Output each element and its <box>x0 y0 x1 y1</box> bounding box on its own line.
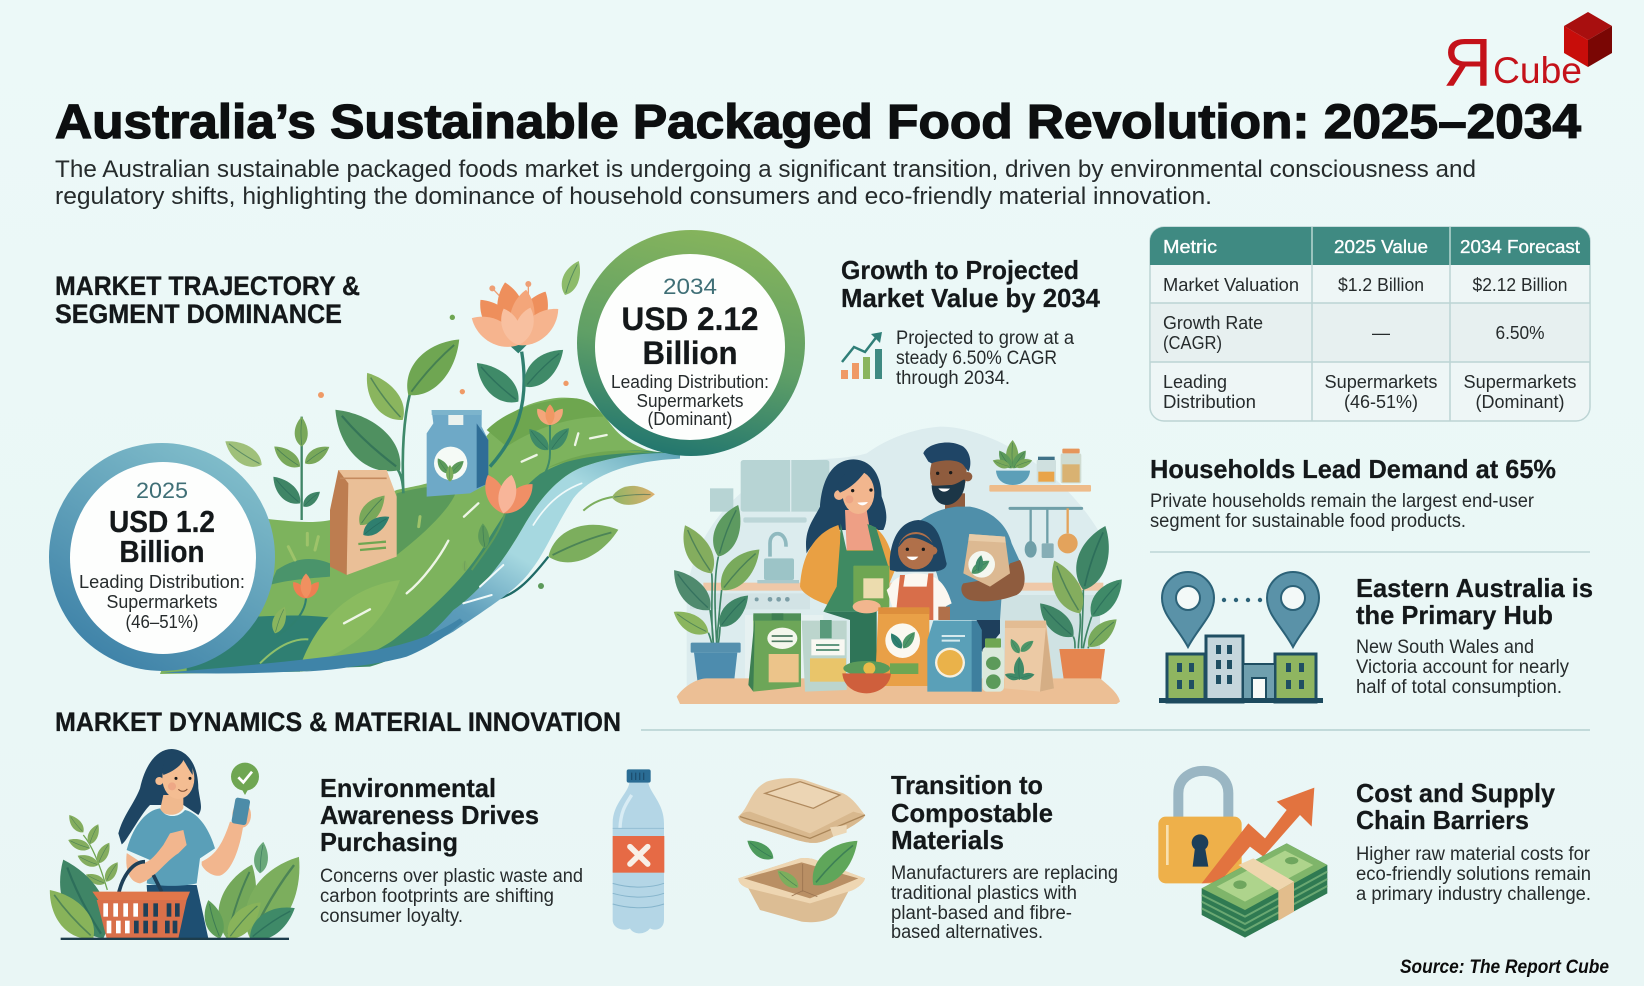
shelf with jars and plant <box>989 440 1091 492</box>
block: growth projection: Market Value by 2034 <box>841 283 1101 313</box>
illustration: family with sustainable food <box>665 427 1129 704</box>
leaf floating <box>743 836 777 864</box>
block: growth projection: through 2034. <box>896 368 1010 389</box>
girl <box>887 520 952 620</box>
table: metric comparison: $2.12 Billion <box>1472 274 1568 295</box>
circle: 2034 value: (Dominant) <box>648 409 732 429</box>
table: metric comparison: (46-51%) <box>1344 391 1418 412</box>
table: metric comparison <box>1150 227 1590 421</box>
block: environmental awareness: Environmental <box>320 773 496 803</box>
drifting leaves behind ribbon <box>490 484 656 600</box>
block: cost and supply barriers: a primary industry challenge. <box>1356 884 1591 905</box>
logo: RCube: Cube <box>1493 50 1582 91</box>
block: environmental awareness <box>320 773 583 927</box>
decorative dots <box>318 258 586 589</box>
icon: padlock, rising arrow and banknotes <box>1158 771 1327 938</box>
table: metric comparison: 6.50% <box>1496 322 1544 343</box>
block: environmental awareness: Concerns over plastic waste and <box>320 866 583 887</box>
block: eastern australia: the Primary Hub <box>1356 600 1553 630</box>
lid <box>738 778 865 843</box>
flowering stem <box>466 279 571 467</box>
circle: 2034 value: Leading Distribution: <box>611 372 769 392</box>
block: cost and supply barriers: Cost and Supply <box>1356 778 1556 808</box>
block: compostable materials: Materials <box>891 825 1004 855</box>
kraft paper bag <box>330 470 397 575</box>
block: growth projection: Growth to Projected <box>841 255 1079 285</box>
table: metric comparison: (Dominant) <box>1476 391 1564 412</box>
plant right <box>1032 521 1129 688</box>
check badge <box>231 763 259 795</box>
block: cost and supply barriers: Higher raw material costs for <box>1356 844 1591 865</box>
circle: 2034 value: 2034 <box>663 274 717 299</box>
block: growth projection: Projected to grow at a <box>896 328 1074 349</box>
block: compostable materials: Transition to <box>891 770 1043 800</box>
block: compostable materials <box>891 770 1118 943</box>
table: metric comparison: Growth Rate <box>1163 312 1263 333</box>
kitchen backdrop <box>687 427 1103 690</box>
table: metric comparison: Distribution <box>1163 391 1256 412</box>
block: compostable materials: Compostable <box>891 798 1053 828</box>
block: eastern australia: Eastern Australia is <box>1356 573 1593 603</box>
small flowers <box>260 404 573 663</box>
circle: 2034 value: USD 2.12 <box>622 301 758 337</box>
block: growth projection <box>841 255 1101 389</box>
block: cost and supply barriers <box>1356 778 1591 905</box>
subtitle <box>55 156 1476 210</box>
table: metric comparison: $1.2 Billion <box>1338 274 1424 295</box>
basket <box>92 862 190 938</box>
logo: RCube: Я <box>1443 25 1492 101</box>
table: metric comparison: Supermarkets <box>1464 371 1576 392</box>
mum <box>800 459 895 663</box>
icon: location pins and city <box>1159 572 1323 703</box>
plant left <box>665 500 768 688</box>
block: households lead demand: Households Lead Demand at 65% <box>1150 454 1556 484</box>
carton package <box>427 410 488 497</box>
circle: 2025 value: Supermarkets <box>106 592 218 612</box>
circle: 2025 value: (46–51%) <box>126 612 198 632</box>
foliage <box>39 812 315 948</box>
icon: plastic bottle with cross <box>613 769 664 933</box>
table: metric comparison: Metric <box>1163 236 1217 257</box>
heading: market dynamics: MARKET DYNAMICS & MATERIAL INNOVATION <box>55 707 621 737</box>
plant tall centre <box>321 328 470 493</box>
table: metric comparison: 2034 Forecast <box>1460 236 1580 257</box>
grass tufts <box>288 517 420 560</box>
block: compostable materials: traditional plastics with <box>891 883 1077 904</box>
block: environmental awareness: carbon footprints are shifting <box>320 886 554 907</box>
block: eastern australia: New South Wales and <box>1356 637 1534 658</box>
dad <box>918 442 1025 653</box>
logo: RCube <box>1443 12 1612 101</box>
table: metric comparison: 2025 Value <box>1334 236 1428 257</box>
circle: 2034 value: Billion <box>642 335 738 371</box>
block: households lead demand: segment for sustainable food products. <box>1150 511 1466 532</box>
block: households lead demand <box>1150 454 1556 532</box>
block: eastern australia: Victoria account for nearly <box>1356 657 1569 678</box>
block: compostable materials: Manufacturers are replacing <box>891 863 1118 884</box>
heading: market trajectory <box>55 271 360 329</box>
block: environmental awareness: Awareness Drives <box>320 800 539 830</box>
circle: 2025 value: USD 1.2 <box>109 504 215 539</box>
circle: 2025 value: 2025 <box>136 478 188 503</box>
circle: 2034 value <box>577 230 805 456</box>
circle: 2025 value: Leading Distribution: <box>79 572 245 592</box>
block: households lead demand: Private households remain the largest end-user <box>1150 491 1535 512</box>
block: eastern australia <box>1356 573 1593 698</box>
table: metric comparison: Supermarkets <box>1324 371 1438 392</box>
block: cost and supply barriers: eco-friendly solutions remain <box>1356 864 1591 885</box>
ribbon highlights <box>344 433 607 623</box>
circle: 2025 value <box>49 443 275 671</box>
table: metric comparison: Market Valuation <box>1163 274 1299 295</box>
subtitle: regulatory shifts, highlighting the dominance of household consumers and eco-friendly material innovation. <box>55 183 1212 210</box>
tray <box>738 831 866 922</box>
circle: 2025 value: Billion <box>120 534 204 569</box>
utensil rack <box>1010 508 1082 558</box>
table: metric comparison: (CAGR) <box>1163 332 1222 353</box>
block: compostable materials: plant-based and fibre- <box>891 903 1072 924</box>
block: eastern australia: half of total consumption. <box>1356 677 1562 698</box>
illustration: woman with basket and phone <box>39 749 315 948</box>
table: metric comparison: Leading <box>1163 371 1227 392</box>
table: metric comparison: — <box>1372 322 1390 343</box>
illustration: green growth ribbon with plants and packages <box>160 258 680 674</box>
plant small left <box>220 417 333 520</box>
block: environmental awareness: consumer loyalty. <box>320 906 463 927</box>
counter <box>677 678 1120 704</box>
circle: 2034 value: Supermarkets <box>636 391 744 411</box>
figure <box>118 749 251 938</box>
block: compostable materials: based alternatives. <box>891 922 1043 943</box>
source note: Source: The Report Cube <box>1400 957 1609 978</box>
block: environmental awareness: Purchasing <box>320 827 458 857</box>
icon: growth chart <box>841 332 882 379</box>
title: Australia’s Sustainable Packaged Food Revolution: 2025–2034 <box>55 96 1581 149</box>
block: growth projection: steady 6.50% CAGR <box>896 348 1057 369</box>
heading: market trajectory: MARKET TRAJECTORY & <box>55 271 360 301</box>
food packages <box>748 607 1054 693</box>
subtitle: The Australian sustainable packaged foods market is undergoing a significant transition, driven by environmental consciousness and <box>55 156 1476 183</box>
icon: compostable containers <box>738 778 866 922</box>
ribbon base <box>160 398 680 674</box>
block: cost and supply barriers: Chain Barriers <box>1356 805 1529 835</box>
heading: market trajectory: SEGMENT DOMINANCE <box>55 299 342 329</box>
